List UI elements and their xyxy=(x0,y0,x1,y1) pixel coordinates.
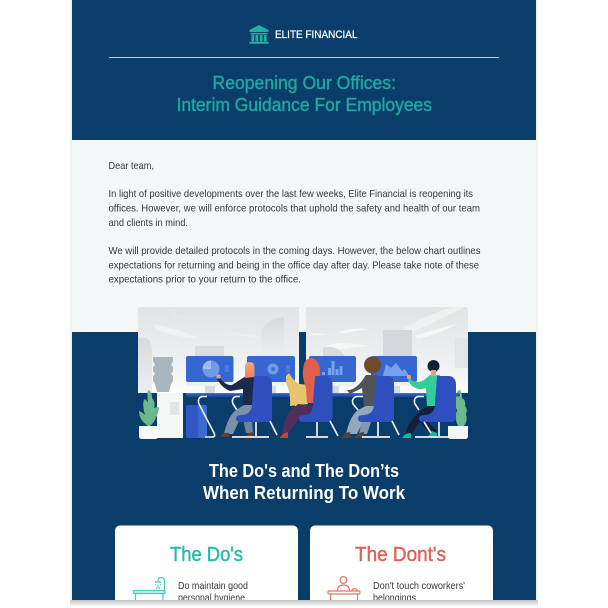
letter body text: expectations prior to your return to the office. xyxy=(108,275,301,286)
don't text xyxy=(374,582,464,600)
person 1 xyxy=(216,362,258,437)
lower band xyxy=(72,332,536,600)
brand name: ELITE FINANCIAL xyxy=(275,29,358,41)
letter body text: expectations for returning and being in the office day after day. Please take note of these xyxy=(108,260,479,271)
chair 4 xyxy=(415,376,456,437)
right plant xyxy=(448,390,468,439)
title: Reopening Our Offices: xyxy=(212,72,396,93)
header band xyxy=(72,0,536,140)
page xyxy=(72,0,536,608)
don't text: belongings xyxy=(373,593,416,604)
chair 3 xyxy=(358,376,399,437)
page shadow edges xyxy=(70,0,538,606)
icon: bathtub and shower xyxy=(134,578,165,602)
monitor 1 with pie chart xyxy=(186,356,234,393)
monitor 3 with bar chart xyxy=(309,356,356,393)
letter panel xyxy=(72,140,536,332)
title: Interim Guidance For Employees xyxy=(176,94,432,115)
person 4 xyxy=(402,360,440,438)
letter body text xyxy=(108,161,480,286)
desk leg frames xyxy=(198,396,424,437)
left window xyxy=(138,307,299,393)
panel: the don'ts xyxy=(310,526,493,608)
do text xyxy=(178,582,248,600)
panel: the do's xyxy=(115,526,298,608)
letter body text: In light of positive developments over the last few weeks, Elite Financial is reopening its xyxy=(108,189,473,200)
do text: personal hygiene xyxy=(178,593,245,604)
right window xyxy=(306,307,468,393)
monitor 2 with donut xyxy=(247,356,295,393)
letter body text: We will provide detailed protocols in the coming days. However, the below chart outlines xyxy=(108,246,480,257)
icon: person at desk xyxy=(328,577,360,602)
letter body text: and clients in mind. xyxy=(108,218,188,229)
title xyxy=(176,72,432,115)
letter body text: Dear team, xyxy=(108,161,154,172)
water cooler xyxy=(153,357,183,438)
icon: bank building xyxy=(250,25,268,44)
heading: the dont's: The Dont's xyxy=(355,543,446,566)
heading: the do's: The Do's xyxy=(170,543,243,566)
illustration: office scene xyxy=(138,307,468,439)
suitcase xyxy=(186,405,207,438)
chair 2 xyxy=(299,376,338,437)
don't text: Don't touch coworkers' xyxy=(373,581,465,592)
section heading xyxy=(203,461,406,503)
section heading: The Do's and The Don’ts xyxy=(209,461,399,481)
header rule xyxy=(109,57,499,58)
letter body text: offices. However, we will enforce protocols that uphold the safety and health of our team xyxy=(108,204,480,214)
do text: Do maintain good xyxy=(178,581,248,592)
chair 1 xyxy=(232,376,277,437)
monitor 4 with area chart xyxy=(371,356,417,393)
left plant xyxy=(139,390,159,439)
person 2 xyxy=(280,358,320,438)
person 3 xyxy=(341,356,381,438)
desk xyxy=(186,393,460,396)
section heading: When Returning To Work xyxy=(203,483,406,503)
